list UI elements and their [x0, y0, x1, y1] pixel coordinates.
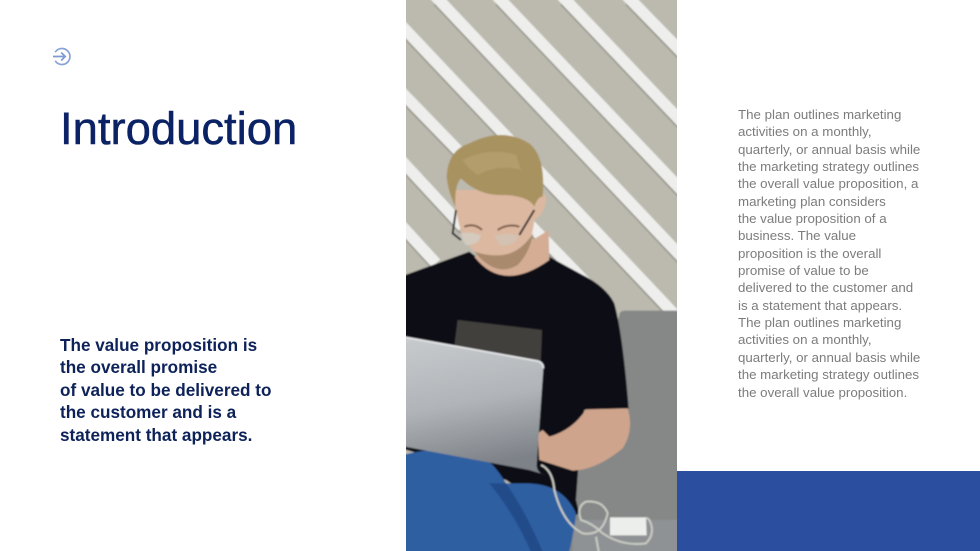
body text block: the value proposition of a	[738, 211, 887, 226]
cable	[541, 465, 652, 551]
body text block: promise of value to be	[738, 263, 869, 278]
body text block: The plan outlines marketing	[738, 315, 901, 330]
body text block: the marketing strategy outlines	[738, 367, 919, 382]
body text block: quarterly, or annual basis while	[738, 142, 920, 157]
body text block: The plan outlines marketing	[738, 107, 901, 122]
blue corner panel	[677, 471, 980, 551]
glasses	[453, 210, 534, 240]
body text block: activities on a monthly,	[738, 124, 872, 139]
body text block: is a statement that appears.	[738, 298, 902, 313]
neck	[474, 230, 549, 276]
lead text block: statement that appears.	[60, 425, 252, 445]
eyes and brows	[464, 225, 519, 230]
lead text block: The value proposition is	[60, 335, 257, 355]
icon: arrow in circle	[53, 48, 71, 66]
beard	[474, 233, 533, 269]
lead text block: of value to be delivered to	[60, 380, 271, 400]
body text block: quarterly, or annual basis while	[738, 350, 920, 365]
shirt print	[454, 320, 542, 363]
body text block: activities on a monthly,	[738, 332, 872, 347]
shirt	[396, 252, 629, 520]
jeans	[396, 448, 576, 551]
title: Introduction	[60, 103, 297, 154]
wall stripes	[399, 0, 686, 327]
hair	[447, 135, 543, 207]
body text block: marketing plan considers	[738, 194, 886, 209]
wall	[393, 0, 690, 551]
body text block: business. The value	[738, 228, 856, 243]
lead text block: the overall promise	[60, 357, 217, 377]
lead text block: the customer and is a	[60, 402, 236, 422]
body text block	[738, 107, 920, 400]
head	[454, 190, 546, 265]
body text block: the marketing strategy outlines	[738, 159, 919, 174]
arm	[538, 408, 630, 471]
wall shadows	[399, 4, 686, 336]
photo: man working on laptop	[406, 0, 677, 551]
laptop	[396, 336, 546, 475]
body text block: the overall value proposition.	[738, 384, 907, 400]
sofa	[566, 311, 690, 551]
body text block: the overall value proposition, a	[738, 176, 918, 191]
body text block: delivered to the customer and	[738, 280, 913, 295]
charger	[610, 517, 647, 535]
lead text block	[60, 335, 271, 445]
body text block: proposition is the overall	[738, 246, 881, 261]
